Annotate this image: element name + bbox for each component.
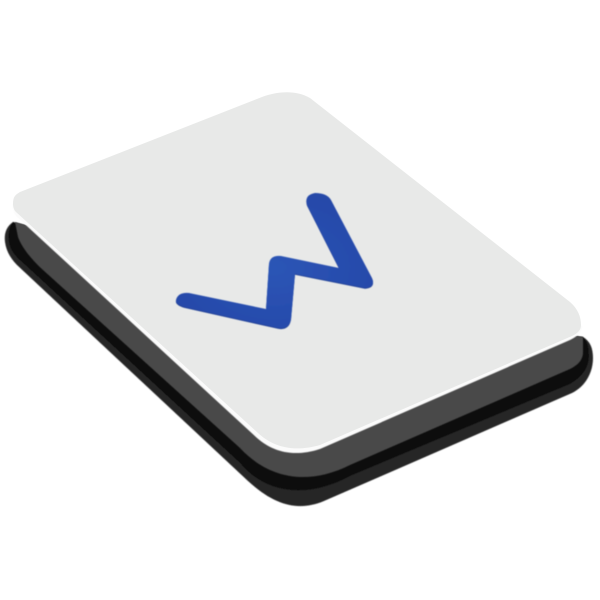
logo: blue W zigzag: [176, 193, 373, 329]
base: black outer tray: [5, 222, 593, 506]
middle: grey layer: [15, 222, 583, 477]
top plate: face: [13, 92, 581, 448]
top plate: white edge: [13, 204, 582, 453]
